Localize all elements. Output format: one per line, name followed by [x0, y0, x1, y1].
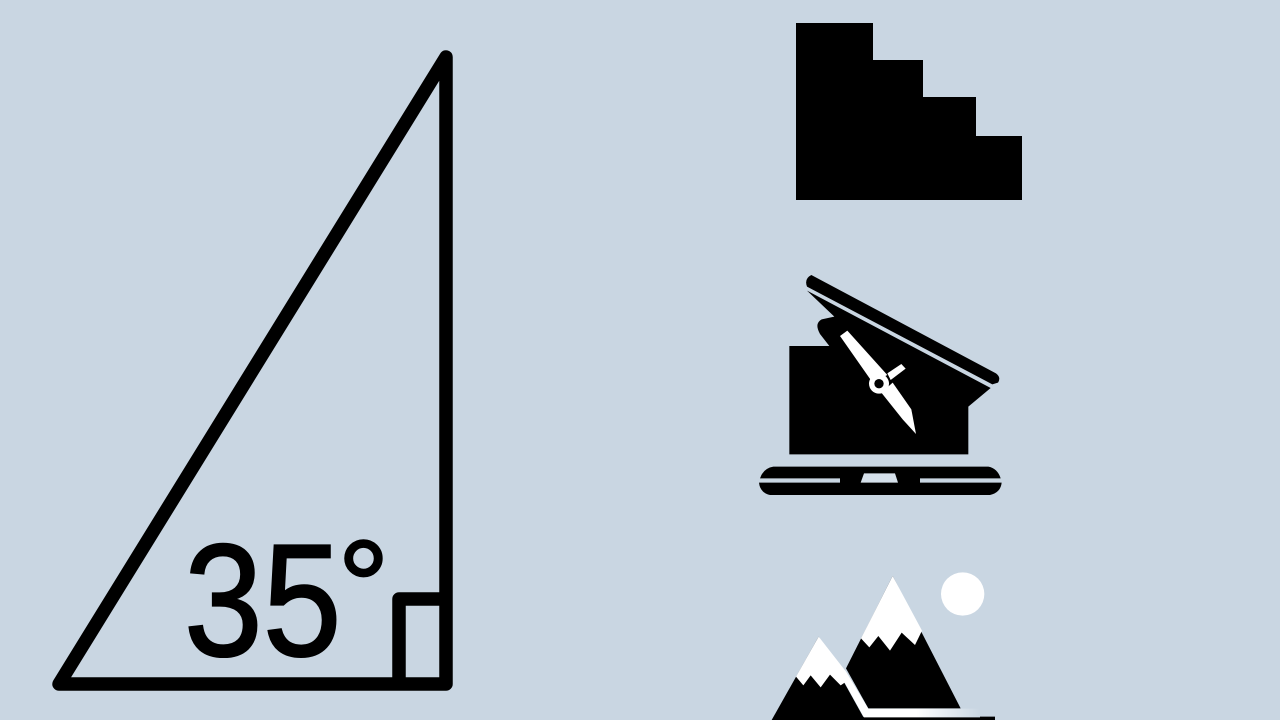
right angle marker	[399, 599, 446, 684]
large mountain	[846, 576, 961, 708]
icon: laptop with compass	[759, 275, 1002, 495]
small mountain	[772, 637, 865, 720]
foreground ground strip	[863, 717, 995, 720]
laptop screen body	[789, 291, 991, 454]
angle label: °	[338, 513, 390, 659]
triangle outline	[59, 57, 446, 684]
sun	[941, 572, 984, 616]
laptop lid top band	[806, 275, 999, 384]
large mountain snow cap	[861, 576, 922, 651]
angle label: 35	[184, 511, 342, 690]
compass needle	[840, 331, 916, 434]
laptop base	[760, 467, 1001, 478]
icon: snowy mountains and sun	[772, 572, 995, 720]
icon: stairs	[796, 23, 1022, 200]
right triangle with 35 degree label	[59, 57, 446, 690]
small mountain snow cap and ridge	[796, 637, 980, 717]
laptop base notch	[861, 473, 898, 483]
